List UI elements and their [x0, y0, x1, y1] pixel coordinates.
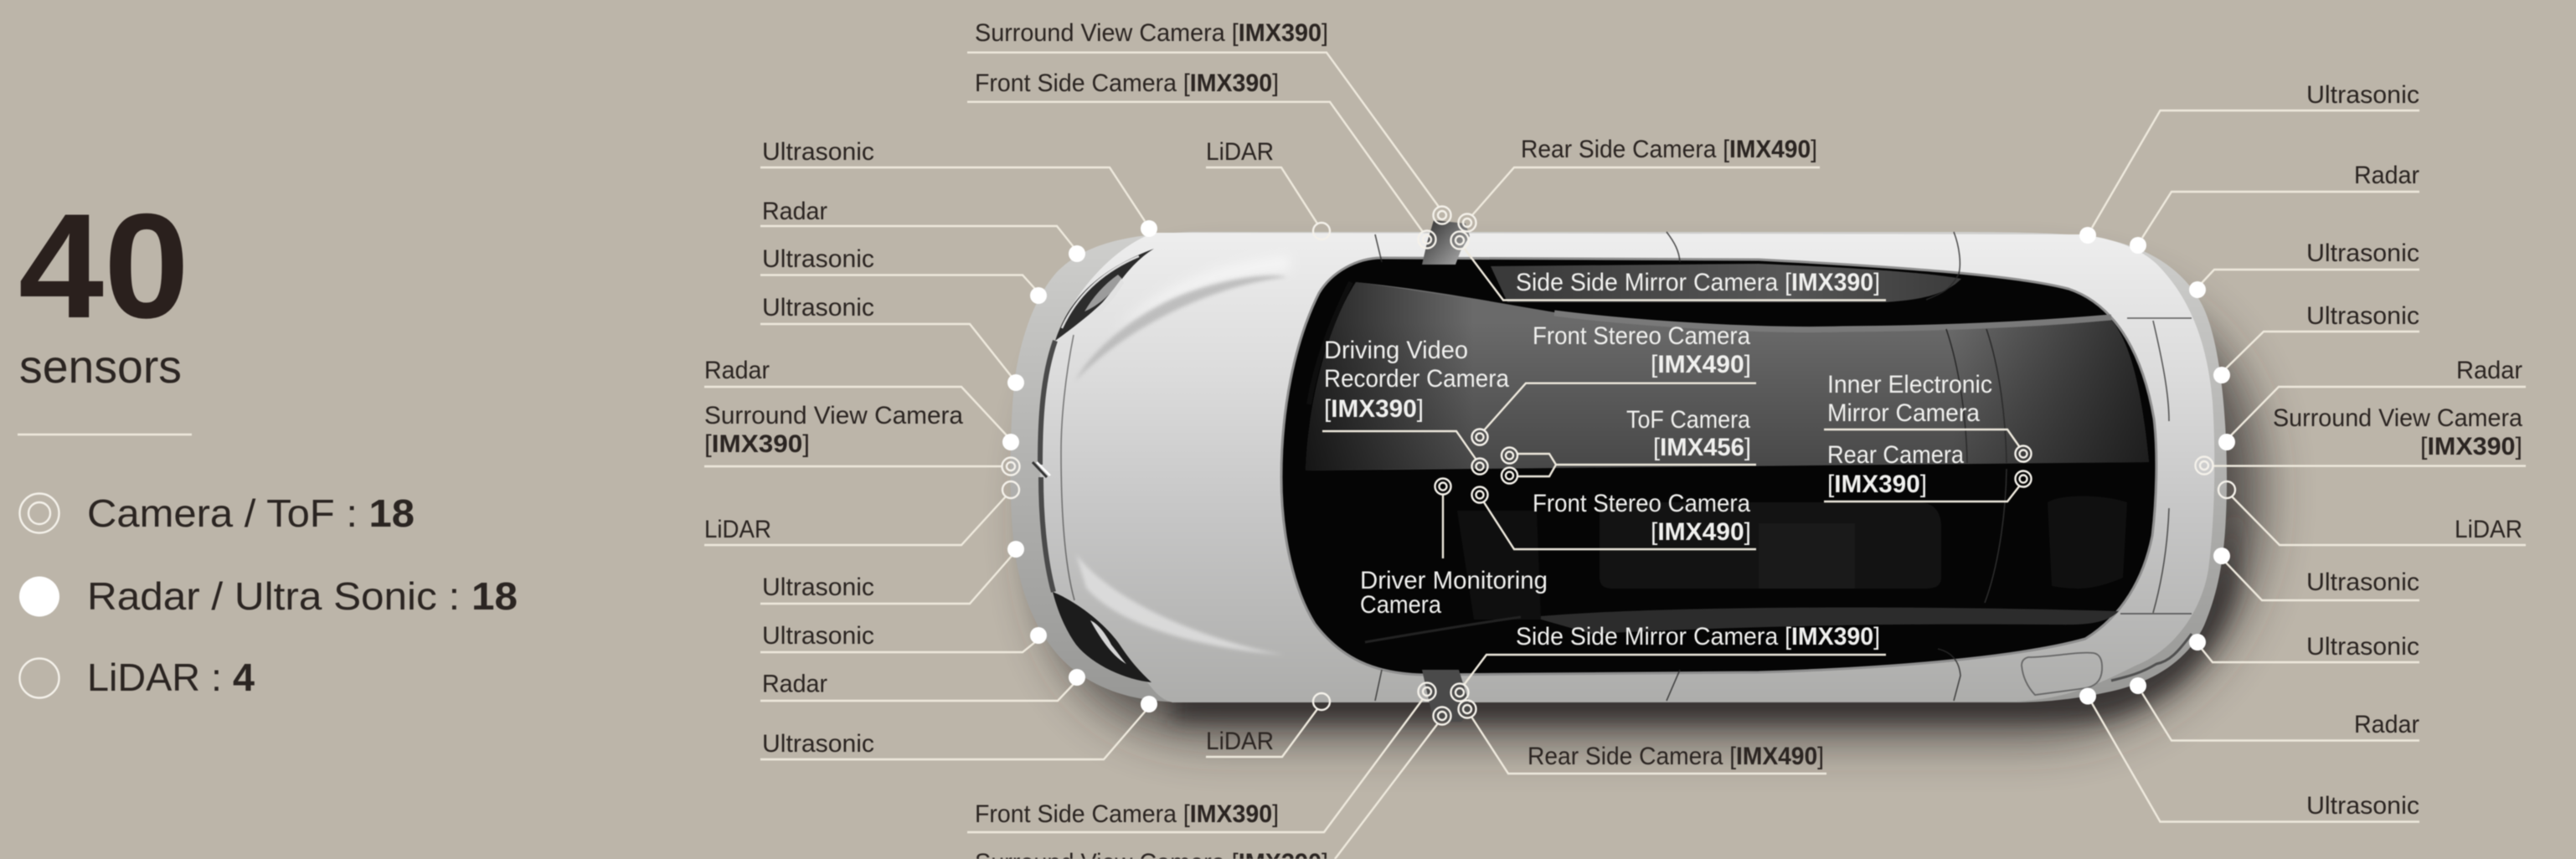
callout: lidar front: LiDAR	[704, 516, 771, 543]
callout: radar rear 2: Radar	[2354, 711, 2419, 738]
callout: radar rear 1: Radar	[2354, 162, 2419, 189]
callouts: mirror cameras	[967, 19, 1886, 859]
callout: side mirror camera bottom: Side Side Mirror Camera [IMX390]	[1516, 623, 1880, 651]
callout: front stereo camera lower: Front Stereo Camera	[1533, 490, 1750, 517]
callout: rear camera	[1824, 441, 2032, 502]
panel: sensor totals and legend	[18, 183, 518, 699]
callout: ultrasonic front right 2: Ultrasonic	[762, 622, 874, 650]
callout: side mirror camera top: Side Side Mirror Camera [IMX390]	[1516, 269, 1880, 296]
upper glass reflection	[1306, 282, 2149, 471]
callout: ultrasonic front left 3: Ultrasonic	[762, 294, 874, 321]
callout: ultrasonic front left 2	[760, 245, 1047, 304]
callout: surround view camera top: Surround View Camera [IMX390]	[975, 19, 1328, 47]
legend: camera text: Camera / ToF : 18	[87, 491, 415, 535]
top side mirror	[1422, 220, 1470, 265]
callout: rear camera: Rear Camera	[1827, 441, 1964, 469]
callout: tof camera: [IMX456]	[1653, 434, 1751, 461]
callouts: outer right	[2079, 81, 2526, 822]
callout: rear camera: [IMX390]	[1827, 471, 1927, 498]
lower glass details	[1365, 496, 2127, 642]
callout: surround view camera rear: [IMX390]	[2420, 433, 2522, 460]
callout: front side camera top	[967, 69, 1435, 248]
upper side window	[1491, 264, 1961, 302]
callout: driver monitoring camera: Driver Monitoring	[1360, 567, 1548, 594]
car shadow	[1038, 276, 2261, 737]
callout: radar front right: Radar	[762, 670, 827, 698]
callout: ultrasonic rear 2	[2189, 239, 2419, 298]
callouts: interior cameras	[1322, 322, 2032, 619]
callout: side mirror camera top	[1450, 231, 1886, 300]
callout: tof camera	[1502, 406, 1756, 484]
callout: surround view camera front: [IMX390]	[704, 430, 810, 458]
callout: lidar side bottom: LiDAR	[1206, 728, 1274, 755]
car body	[1040, 233, 2214, 702]
callout: driving video recorder camera: Recorder Camera	[1324, 365, 1509, 393]
callout: rear side camera top	[1459, 136, 1820, 231]
callout: ultrasonic rear 4: Ultrasonic	[2306, 568, 2419, 596]
callout: radar front	[704, 357, 1019, 450]
callout: lidar side top	[1206, 138, 1330, 239]
windscreen and roof glass frame	[1281, 258, 2156, 675]
callout: ultrasonic front right 1	[760, 696, 1157, 759]
front headlight bottom	[1053, 592, 1151, 682]
callout: rear side camera top: Rear Side Camera [IMX490]	[1521, 136, 1817, 163]
callout: surround view camera rear: Surround View Camera	[2273, 404, 2522, 432]
callout: radar front left: Radar	[762, 198, 827, 225]
callout: radar rear 1	[2130, 162, 2419, 254]
car outer bumper band	[1011, 232, 2227, 702]
bottom side mirror	[1422, 670, 1471, 722]
callout: front stereo camera upper: [IMX490]	[1651, 351, 1751, 378]
sensors caption: sensors	[19, 340, 182, 393]
callout: surround view camera front: Surround View Camera	[704, 402, 963, 430]
callout: driving video recorder camera	[1322, 337, 1509, 474]
callout: inner electronic mirror camera	[1824, 371, 2032, 462]
callout: ultrasonic front left 2: Ultrasonic	[762, 245, 874, 273]
callout: driving video recorder camera: [IMX390]	[1324, 395, 1424, 423]
callout: surround view camera front	[704, 402, 1020, 476]
callout: front side camera bottom: Front Side Camera [IMX390]	[975, 800, 1279, 828]
callout: driver monitoring camera: Camera	[1360, 591, 1441, 619]
callout: driver monitoring camera	[1360, 479, 1548, 619]
callout: lidar front	[704, 481, 1019, 545]
callout: ultrasonic front left 1: Ultrasonic	[762, 138, 874, 166]
callout: tof camera: ToF Camera	[1626, 406, 1750, 434]
callout: ultrasonic rear 5	[2189, 633, 2419, 662]
callout: front side camera top: Front Side Camera [IMX390]	[975, 69, 1279, 97]
callout: radar front: Radar	[704, 357, 770, 384]
rear seams	[1375, 232, 2192, 701]
callout: lidar rear	[2218, 481, 2526, 545]
front seams	[1033, 335, 1074, 600]
callout: inner electronic mirror camera: Inner Electronic	[1827, 371, 1992, 399]
callout: radar rear	[2218, 357, 2526, 450]
legend: radar text: Radar / Ultra Sonic : 18	[87, 574, 518, 618]
callout: lidar rear: LiDAR	[2455, 516, 2522, 543]
callout: radar rear: Radar	[2456, 357, 2522, 384]
callout: ultrasonic front left 1	[760, 138, 1157, 237]
car illustration, top view	[1011, 220, 2227, 722]
callout: ultrasonic front left 3	[760, 294, 1024, 391]
callout: radar front right	[760, 669, 1085, 701]
callout: rear side camera bottom	[1459, 700, 1826, 774]
callout: surround view camera bottom	[975, 707, 1450, 859]
callout: front stereo camera upper: Front Stereo Camera	[1533, 322, 1750, 350]
total number: 40	[18, 183, 189, 349]
callout: ultrasonic front right 3: Ultrasonic	[762, 574, 874, 601]
front headlight top	[1055, 249, 1154, 341]
callout: radar front left	[760, 198, 1085, 262]
callout: ultrasonic front right 1: Ultrasonic	[762, 730, 874, 758]
callout: lidar side top: LiDAR	[1206, 138, 1274, 166]
legend: radar icon	[19, 576, 59, 616]
callout: ultrasonic rear 3: Ultrasonic	[2306, 302, 2419, 330]
callout: ultrasonic rear 4	[2213, 548, 2419, 600]
callout: ultrasonic rear 6: Ultrasonic	[2306, 792, 2419, 820]
callout: lidar side bottom	[1206, 693, 1330, 757]
callout: front stereo camera lower: [IMX490]	[1651, 518, 1751, 546]
legend: lidar icon	[20, 658, 59, 698]
callout: side mirror camera bottom	[1450, 623, 1886, 702]
callout: ultrasonic front right 2	[760, 622, 1047, 652]
hood highlights	[1075, 256, 1290, 655]
callout: ultrasonic rear 1: Ultrasonic	[2306, 81, 2419, 109]
callout: driving video recorder camera: Driving Video	[1324, 337, 1468, 364]
callout: ultrasonic rear 5: Ultrasonic	[2306, 633, 2419, 661]
callout: ultrasonic front right 3	[760, 541, 1024, 604]
callout: front side camera bottom	[967, 683, 1435, 832]
callout: front stereo camera lower	[1472, 487, 1756, 549]
callout: radar rear 2	[2130, 677, 2419, 740]
legend: camera icon	[20, 494, 59, 532]
callout: surround view camera rear	[2196, 404, 2526, 474]
callout: rear side camera bottom: Rear Side Camera [IMX490]	[1528, 743, 1824, 770]
callout: inner electronic mirror camera: Mirror Camera	[1827, 399, 1980, 427]
callout: front stereo camera upper	[1472, 322, 1756, 445]
callout: surround view camera top	[967, 19, 1450, 224]
callout: ultrasonic rear 6	[2079, 688, 2419, 822]
callout: ultrasonic rear 2: Ultrasonic	[2306, 239, 2419, 267]
callout: ultrasonic rear 3	[2213, 302, 2419, 383]
callout: ultrasonic rear 1	[2079, 81, 2419, 244]
legend: lidar text: LiDAR : 4	[87, 656, 255, 699]
callouts: outer left	[704, 138, 1330, 759]
